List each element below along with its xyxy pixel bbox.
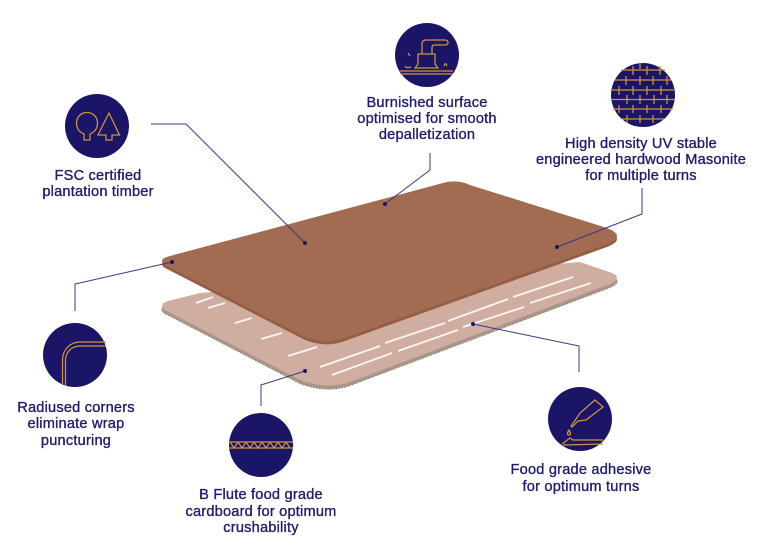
icon: B flute cardboard [229, 413, 293, 477]
text: burnished surface: optimised for smooth [357, 111, 497, 127]
text: adhesive: Food grade adhesive [511, 462, 651, 478]
text: B flute: B Flute food grade [199, 487, 323, 503]
text: radiused corners: puncturing [41, 433, 111, 449]
icon: burnishing tool [395, 23, 459, 87]
text: Masonite: engineered hardwood Masonite [536, 152, 746, 168]
leader line: B flute [261, 369, 307, 406]
text: FSC certified plantation timber: plantation timber [42, 184, 154, 200]
text: radiused corners [17, 400, 135, 449]
icon: radiused corner [43, 323, 107, 387]
upper board: hardwood Masonite [162, 181, 617, 344]
text: Masonite: for multiple turns [585, 168, 697, 184]
text: adhesive [511, 462, 651, 495]
icon: trees [65, 94, 129, 158]
cardboard top face [162, 262, 617, 386]
board edge [162, 184, 617, 344]
text: B flute: crushability [223, 520, 299, 536]
text: Masonite [536, 136, 746, 184]
icon: brick texture [611, 63, 675, 127]
cardboard edge [162, 266, 617, 389]
leader line: burnished surface [383, 153, 430, 206]
leader line: timber [151, 124, 307, 245]
text: burnished surface: Burnished surface [366, 95, 488, 111]
white adhesive lines [196, 277, 591, 375]
text: FSC certified plantation timber [42, 168, 154, 200]
text: Masonite: High density UV stable [565, 136, 717, 152]
text: burnished surface [357, 95, 497, 143]
text: FSC certified plantation timber: FSC certified [55, 168, 141, 184]
icon: glue tube [548, 387, 612, 451]
board top face [162, 181, 617, 341]
leader line: adhesive [471, 322, 579, 372]
text: burnished surface: depalletization [379, 127, 475, 143]
text: adhesive: for optimum turns [523, 479, 639, 495]
text: radiused corners: Radiused corners [17, 400, 135, 416]
leader line: radiused corners [75, 260, 174, 311]
text: radiused corners: eliminate wrap [28, 416, 124, 432]
leader line: Masonite [555, 188, 642, 249]
text: B flute: cardboard for optimum [185, 504, 337, 520]
lower board: B flute cardboard [162, 262, 617, 389]
text: B flute [185, 487, 337, 536]
